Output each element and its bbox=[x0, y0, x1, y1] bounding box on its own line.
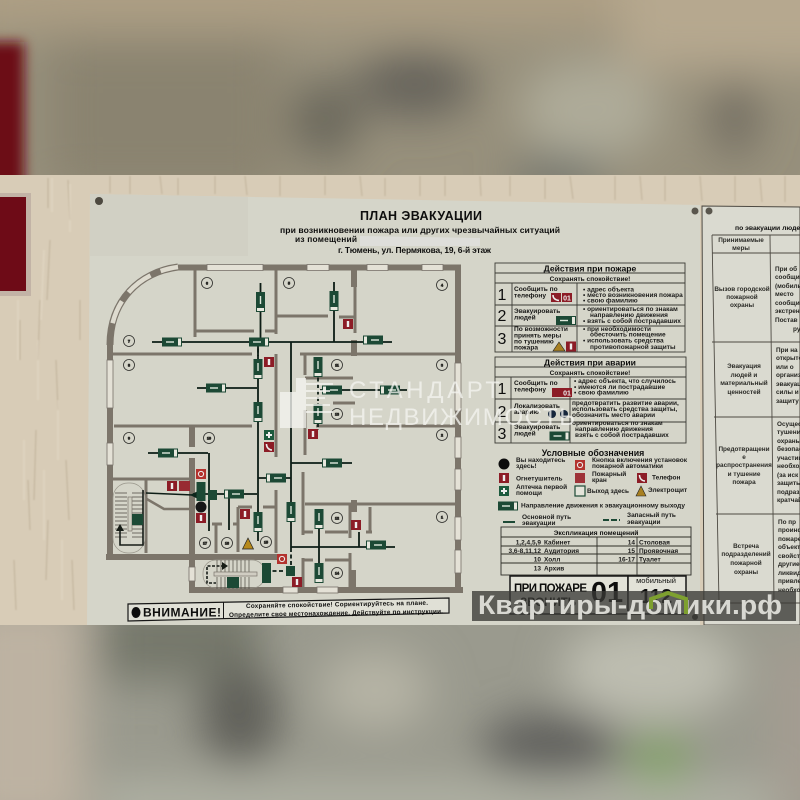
room numbers: 15 bbox=[264, 540, 268, 544]
table: actions in case of fire: Сохранять спокойствие! bbox=[550, 275, 630, 283]
bottom blurred band bbox=[0, 625, 800, 800]
table: actions in case of fire: направлению движения bbox=[590, 312, 668, 319]
second plate: measures table: При на bbox=[776, 347, 798, 354]
table: actions in case of accident: обозначить место аварии bbox=[572, 411, 655, 419]
table: actions in case of fire: • взять с собой пострадавших bbox=[583, 317, 681, 325]
second plate: measures table: Предотвращени bbox=[718, 446, 770, 453]
plan safety icons bbox=[167, 319, 361, 587]
room numbers: 9 bbox=[128, 436, 130, 440]
room explication table: Аудитория bbox=[544, 548, 579, 555]
table: actions in case of accident: предотвратить развитие аварии, bbox=[572, 400, 679, 407]
second plate: measures table: пожара bbox=[732, 479, 756, 486]
room numbers: 6 bbox=[206, 282, 208, 286]
top blurred band bbox=[0, 0, 800, 175]
second plate: measures table: место bbox=[775, 291, 794, 298]
room numbers: 5 bbox=[288, 282, 290, 286]
room explication table: 1,2,4,5,9 bbox=[516, 540, 541, 546]
legend of symbols: эвакуации bbox=[522, 520, 556, 527]
attention banner: Определите свое местонахождение. Действуйте по инструкции. bbox=[229, 607, 443, 619]
table: actions in case of accident: 1 bbox=[498, 381, 507, 398]
plan title: г. Тюмень, ул. Пермякова, 19, 6-й этаж bbox=[338, 245, 491, 255]
legend of symbols: Телефон bbox=[652, 474, 680, 482]
second plate: measures table: пожарной bbox=[726, 293, 758, 301]
table: actions in case of fire: По возможности bbox=[514, 326, 568, 333]
second plate: measures table: защиту bbox=[776, 398, 799, 405]
table: actions in case of accident: • свою фамилию bbox=[574, 390, 629, 396]
room explication table: Архив bbox=[544, 566, 564, 572]
second plate: measures table: материальный bbox=[720, 379, 768, 387]
plan title bbox=[280, 209, 560, 255]
room explication table: 10 bbox=[534, 556, 541, 564]
second plate: measures table: пожарной bbox=[730, 559, 762, 567]
evacuation plan plate bbox=[87, 194, 700, 625]
second plate: measures table: силы и bbox=[776, 389, 799, 396]
room numbers: 7 bbox=[128, 340, 130, 344]
fire phone numbers box: 01 bbox=[591, 577, 623, 609]
table: actions in case of fire: 3 bbox=[498, 331, 507, 348]
legend of symbols: кран bbox=[592, 477, 607, 484]
table: actions in case of accident: людей bbox=[514, 430, 536, 438]
room explication table: Холл bbox=[544, 556, 560, 564]
second plate: measures table: необхо bbox=[778, 586, 800, 594]
table: actions in case of fire: Эвакуировать bbox=[514, 308, 560, 315]
fire phone numbers box bbox=[510, 576, 686, 614]
room numbers: 12 bbox=[335, 516, 339, 520]
table: actions in case of fire: людей bbox=[514, 314, 536, 322]
lower staircase bbox=[203, 560, 271, 589]
second plate: measures table: и тушение bbox=[728, 471, 761, 478]
room explication table: 15 bbox=[628, 548, 635, 555]
table: actions in case of fire: • использовать средства bbox=[583, 338, 664, 344]
attention banner bbox=[128, 598, 449, 621]
room numbers: 10 bbox=[207, 436, 211, 440]
plate screw top right bbox=[692, 208, 698, 214]
room numbers: 2 bbox=[441, 434, 443, 438]
room numbers: 4 bbox=[441, 284, 443, 288]
room explication table: 13 bbox=[534, 566, 541, 572]
table: actions in case of fire: принять меры bbox=[514, 332, 562, 340]
table: actions in case of accident: Локализовать bbox=[514, 403, 560, 410]
table: actions in case of fire: • при необходимости bbox=[583, 325, 651, 333]
left staircase bbox=[113, 483, 145, 553]
table: actions in case of accident: • имеются ли пострадавшие bbox=[574, 384, 665, 391]
wall background bbox=[0, 175, 800, 625]
legend of symbols: Кнопка включения установок bbox=[592, 457, 688, 464]
table: actions in case of accident: использовать средства защиты, bbox=[572, 406, 677, 413]
room numbers: 16 bbox=[225, 542, 229, 546]
watermark: Standard Real Estate bbox=[280, 377, 575, 431]
second plate: measures table: охраны bbox=[730, 302, 755, 309]
second plate: measures table: ценностей bbox=[727, 388, 761, 396]
legend of symbols: помощи bbox=[516, 490, 542, 497]
room explication table: Столовая bbox=[639, 540, 670, 546]
second plate: measures table: людей и bbox=[731, 371, 757, 379]
table: actions in case of accident: Сообщить по bbox=[514, 379, 558, 387]
table: actions in case of accident: 3 bbox=[498, 426, 507, 443]
second plate: measures table: или о bbox=[776, 364, 794, 371]
room explication table: 14 bbox=[628, 540, 635, 546]
second plate: measures table: распространения bbox=[716, 462, 772, 469]
table: actions in case of fire: по тушению bbox=[514, 338, 554, 346]
legend of symbols: Выход здесь bbox=[587, 488, 629, 495]
second plate: measures table: Постав bbox=[775, 317, 798, 324]
legend of symbols: Основной путь bbox=[522, 513, 571, 521]
legend of symbols: Условные обозначения bbox=[542, 448, 644, 458]
attention banner: Сохраняйте спокойствие! Сориентируйтесь на плане. bbox=[246, 599, 428, 610]
table: actions in case of fire: • место возникновения пожара bbox=[583, 292, 683, 299]
second plate: measures table: объект bbox=[778, 543, 800, 551]
legend of symbols: Направление движения к эвакуационному выходу bbox=[521, 502, 685, 510]
table: actions in case of fire: Сообщить по bbox=[514, 285, 558, 293]
room numbers: 14 bbox=[335, 572, 339, 576]
legend of symbols: здесь! bbox=[516, 463, 537, 470]
second plate: measures table: При об bbox=[775, 265, 797, 273]
watermark: Standard Real Estate: СТАНДАРТ bbox=[349, 377, 500, 404]
table: actions in case of fire: телефону bbox=[514, 292, 546, 300]
plate lower screw bbox=[692, 614, 698, 620]
room numbers: 3 bbox=[441, 364, 443, 368]
plan title: при возникновении пожара или других чрезвычайных ситуаций bbox=[280, 225, 560, 235]
room explication table: Туалет bbox=[639, 556, 661, 564]
legend of symbols: пожарной автоматики bbox=[592, 462, 663, 470]
table: actions in case of fire: • ориентироваться по знакам bbox=[583, 306, 678, 313]
room explication table bbox=[501, 527, 691, 575]
legend of symbols: Аптечка первой bbox=[516, 483, 567, 491]
red poster on the wall bbox=[0, 193, 31, 296]
legend of symbols: эвакуации bbox=[627, 519, 661, 526]
table: actions in case of accident: аварию bbox=[514, 409, 539, 416]
table: actions in case of fire: • адрес объекта bbox=[583, 286, 634, 294]
floor plan bbox=[106, 264, 463, 593]
room numbers: 13 bbox=[335, 412, 339, 416]
second plate: measures table: подразделений bbox=[721, 550, 771, 558]
second plate: measures table: Эвакуация bbox=[727, 363, 761, 370]
table: actions in case of fire: • свою фамилию bbox=[583, 298, 638, 304]
second plate: measures table: другие bbox=[778, 561, 800, 568]
table: actions in case of fire: Действия при пожаре bbox=[544, 264, 637, 274]
second plate: measures table: меры bbox=[732, 245, 750, 252]
room numbers bbox=[124, 278, 448, 578]
room explication table: Кабинет bbox=[544, 538, 570, 546]
table: actions in case of fire: 2 bbox=[498, 308, 507, 325]
building walls bbox=[106, 267, 463, 590]
second plate: measures table: По пр bbox=[778, 519, 796, 526]
legend of symbols: Огнетушитель bbox=[516, 476, 563, 482]
second plate: measures table: Вызов городской bbox=[714, 285, 770, 293]
legend of symbols: Вы находитесь bbox=[516, 457, 565, 464]
second plate: measures table: экстрен bbox=[775, 308, 800, 315]
fire phone numbers box: ЗВОНИТЬ bbox=[520, 597, 576, 609]
watermark: Standard Real Estate: НЕДВИЖИМОСТЬ bbox=[349, 404, 575, 431]
second plate: measures table: Принимаемые bbox=[718, 237, 764, 244]
second plate: measures table: е bbox=[742, 454, 746, 461]
table: actions in case of accident: взять с собой пострадавших bbox=[575, 431, 669, 439]
table: actions in case of fire: противопожарной защиты bbox=[590, 343, 676, 351]
windows bbox=[107, 264, 461, 593]
fire phone numbers box: ПРИ ПОЖАРЕ bbox=[514, 583, 587, 595]
plan title: ПЛАН ЭВАКУАЦИИ bbox=[360, 209, 482, 223]
table: actions in case of fire bbox=[495, 263, 685, 352]
second plate: measures table: охраны bbox=[734, 569, 759, 576]
legend of symbols: Электрощит bbox=[648, 487, 687, 494]
second plate: measures table bbox=[702, 206, 800, 625]
room numbers: 8 bbox=[128, 364, 130, 368]
room explication table: 3,6-8,11,12 bbox=[508, 548, 541, 555]
table: actions in case of accident: • адрес объекта, что случилось bbox=[574, 377, 676, 385]
fire phone numbers box: мобильный bbox=[636, 576, 676, 585]
room explication table: 16-17 bbox=[618, 556, 635, 564]
table: actions in case of accident: 01 bbox=[563, 390, 571, 398]
table: actions in case of fire: 1 bbox=[498, 287, 507, 304]
fire phone numbers box: 112 bbox=[640, 586, 672, 608]
table: actions in case of accident: Действия при аварии bbox=[544, 358, 636, 368]
attention banner: ВНИМАНИЕ! bbox=[143, 606, 221, 620]
table: actions in case of accident: ориентироваться по знакам bbox=[572, 420, 663, 427]
table: actions in case of fire: пожара bbox=[514, 344, 538, 352]
second plate: measures table: (за иск bbox=[777, 472, 799, 479]
table: actions in case of accident bbox=[495, 357, 686, 443]
room numbers: 11 bbox=[335, 364, 339, 368]
plan title: из помещений bbox=[295, 234, 357, 244]
second plate: measures table: Встреча bbox=[733, 543, 759, 550]
room explication table: Проявочная bbox=[639, 548, 678, 555]
legend of symbols: Пожарный bbox=[592, 470, 626, 478]
evacuation direction signs bbox=[158, 291, 400, 583]
table: actions in case of accident: Эвакуировать bbox=[514, 424, 560, 431]
legend of symbols bbox=[498, 448, 688, 527]
room numbers: 17 bbox=[203, 542, 207, 546]
room numbers: 1 bbox=[441, 516, 443, 520]
second plate: measures table: тушени bbox=[777, 429, 800, 436]
room explication table: Экспликация помещений bbox=[554, 529, 638, 537]
table: actions in case of accident: 2 bbox=[498, 404, 507, 421]
plate screw top left bbox=[95, 197, 103, 205]
legend of symbols: Запасный путь bbox=[627, 511, 676, 519]
table: actions in case of fire: 01 bbox=[563, 296, 571, 302]
table: actions in case of accident: Сохранять спокойствие! bbox=[550, 369, 630, 377]
table: actions in case of fire: обесточить помещение bbox=[590, 330, 666, 338]
table: actions in case of accident: направлению движения bbox=[575, 426, 653, 433]
watermark band: site name: Квартиры-домики.рф bbox=[478, 590, 782, 620]
evacuation routes bbox=[146, 282, 407, 582]
table: actions in case of accident: телефону bbox=[514, 386, 546, 394]
